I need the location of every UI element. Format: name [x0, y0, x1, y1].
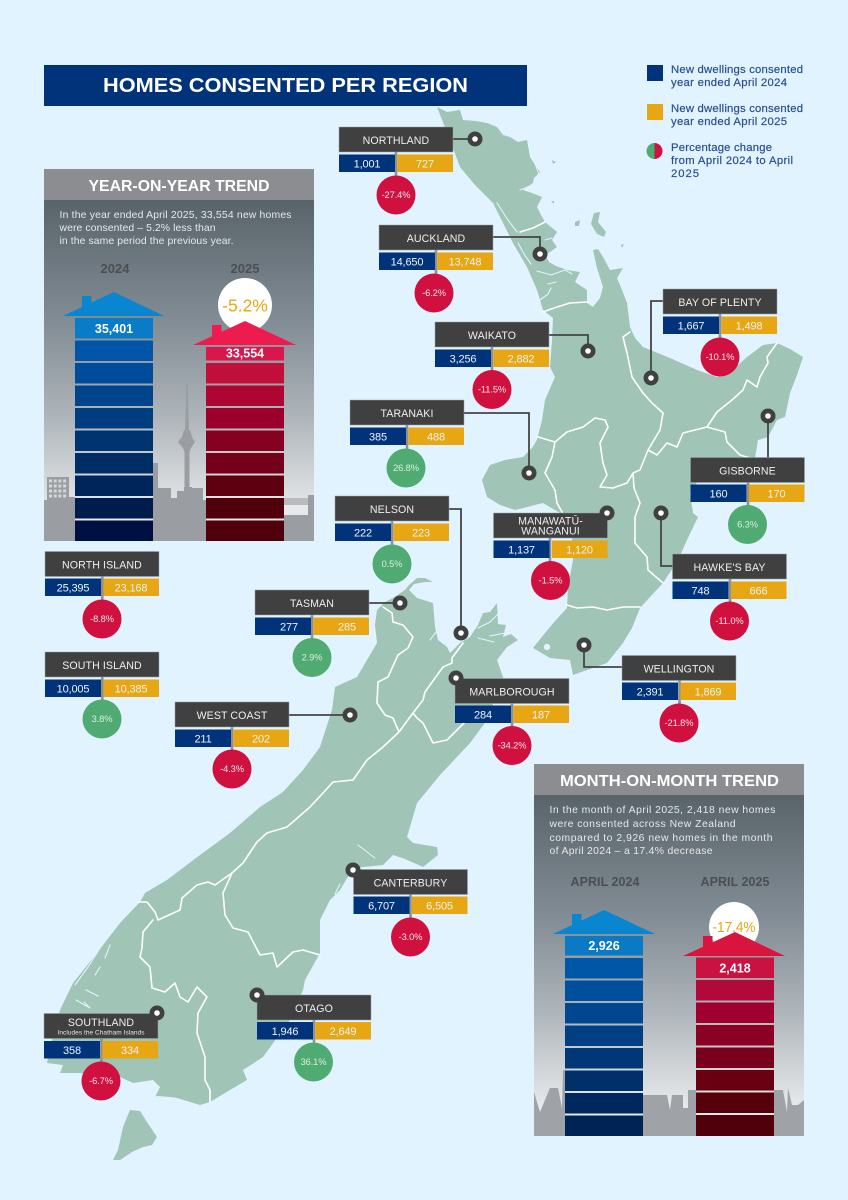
callout: -5.2%: -5.2% — [222, 296, 268, 316]
label: Southland — [44, 1014, 158, 1038]
region: Wellington — [576, 638, 736, 742]
label: Manawatū-Wanganui — [494, 513, 608, 538]
house: April 2024 — [553, 910, 655, 1136]
legend text: percentage change: 2025 — [671, 168, 699, 180]
panel: year-on-year trend — [44, 169, 314, 541]
change: Wellington: -21.8% — [665, 718, 693, 728]
values: Nelson — [335, 524, 449, 541]
change: Gisborne: 6.3% — [737, 520, 758, 530]
values: Auckland: 13,748 — [449, 256, 481, 268]
label: Southland: SOUTHLAND — [68, 1017, 134, 1029]
values: West Coast: 202 — [252, 734, 270, 746]
values: Northland — [339, 154, 453, 172]
summary: South Island — [45, 652, 159, 738]
summary: North Island — [45, 552, 159, 638]
legend swatch: 2025 — [647, 104, 663, 120]
values: Northland: 727 — [416, 158, 434, 170]
label: West Coast — [175, 702, 289, 727]
panel description: In the year ended April 2025, 33,554 new homes — [60, 210, 292, 221]
title banner: HOMES CONSENTED PER REGION — [103, 75, 468, 97]
change: Canterbury: -3.0% — [399, 932, 422, 942]
label: Taranaki — [350, 400, 464, 425]
legend text: 2024: New dwellings consented — [671, 64, 803, 76]
region: Taranaki — [350, 400, 536, 488]
values: Manawatū-Wanganui — [494, 540, 608, 558]
values: Marlborough — [455, 706, 569, 723]
region: West Coast — [175, 702, 358, 788]
values: Gisborne: 160 — [710, 488, 727, 500]
change: Wellington — [660, 704, 698, 742]
pin: Gisborne — [760, 408, 776, 424]
values: Nelson: 223 — [412, 528, 430, 540]
label: Wellington: WELLINGTON — [644, 664, 714, 676]
region: Marlborough — [448, 670, 569, 765]
values: South Island — [45, 680, 159, 697]
house: April 2025: 2,418 — [719, 962, 751, 976]
column label: 2024: 2024 — [101, 261, 130, 276]
values: Southland: 358 — [63, 1045, 81, 1057]
change: Bay of Plenty: -10.1% — [706, 352, 734, 362]
label: Taranaki: TARANAKI — [380, 408, 434, 420]
legend icon: percentage change — [646, 143, 662, 159]
pin: Canterbury — [346, 862, 360, 878]
values: Bay of Plenty: 1,667 — [678, 320, 704, 332]
column label: 2025: 2025 — [231, 261, 259, 276]
panel description: In the month of April 2025, 2,418 new homes — [550, 805, 776, 816]
callout: -5.2% — [218, 278, 272, 332]
change: Tasman — [292, 638, 332, 677]
map: South Island — [47, 578, 518, 1105]
legend text: 2024: year ended April 2024 — [671, 77, 787, 89]
legend text: percentage change: from April 2024 to April — [671, 155, 793, 167]
panel header — [44, 169, 314, 200]
change: Manawatū-Wanganui: -1.5% — [539, 576, 562, 586]
pin: Bay of Plenty — [644, 370, 658, 386]
panel description: were consented – 5.2% less than — [58, 223, 216, 234]
change: Marlborough: -34.2% — [498, 740, 526, 750]
pin: Marlborough — [448, 670, 464, 686]
region: Nelson — [335, 496, 468, 640]
values: North Island: 25,395 — [57, 582, 89, 594]
region: Waikato — [435, 322, 596, 409]
change: West Coast — [212, 750, 252, 788]
change: Waikato — [472, 370, 512, 409]
values: Waikato — [435, 350, 549, 367]
label: Manawatū-Wanganui: MANAWATŪ- — [518, 516, 583, 528]
values: Otago: 2,649 — [330, 1026, 356, 1038]
pin: Nelson — [454, 626, 468, 640]
panel description: compared to 2,926 new homes in the month — [550, 833, 773, 844]
region: Bay of Plenty — [644, 289, 777, 386]
values: South Island: 10,005 — [57, 684, 89, 696]
region: Hawke's Bay — [654, 506, 786, 640]
values: West Coast — [175, 730, 289, 747]
values: Gisborne — [690, 484, 804, 502]
label: Canterbury: CANTERBURY — [374, 878, 447, 890]
values: Bay of Plenty: 1,498 — [736, 320, 762, 332]
label: West Coast: WEST COAST — [197, 710, 268, 722]
values: Gisborne: 170 — [768, 488, 785, 500]
pin: Northland — [468, 132, 482, 146]
label: Nelson: NELSON — [370, 504, 414, 516]
change: North Island: -8.8% — [90, 614, 114, 624]
region: Manawatū-Wanganui — [494, 506, 614, 600]
values: Tasman: 277 — [280, 622, 298, 634]
panel description: were consented across New Zealand — [548, 819, 736, 830]
skyline: city — [534, 1070, 804, 1136]
values: Marlborough: 284 — [474, 710, 492, 722]
label: Northland: NORTHLAND — [363, 135, 430, 147]
values: Taranaki — [350, 428, 464, 445]
panel: month-on-month trend — [534, 764, 804, 1136]
label: Tasman: TASMAN — [290, 598, 334, 610]
map: harbours and lakes — [75, 160, 572, 1098]
change: Hawke's Bay: -11.0% — [715, 616, 744, 626]
values: Waikato: 2,882 — [508, 354, 534, 366]
legend text: 2025: year ended April 2025 — [671, 116, 787, 128]
legend swatch: 2024 — [647, 65, 663, 81]
house: 2025: 33,554 — [226, 346, 264, 360]
region: Canterbury — [346, 862, 468, 956]
label: Otago: OTAGO — [295, 1003, 333, 1015]
column label: April 2025: APRIL 2025 — [700, 875, 770, 889]
label: South Island: SOUTH ISLAND — [62, 660, 142, 672]
change: Auckland: -6.2% — [422, 288, 446, 298]
values: Canterbury: 6,505 — [426, 900, 453, 912]
map: small islands — [551, 160, 624, 248]
pin: Manawatū-Wanganui — [600, 506, 614, 520]
values: Hawke's Bay: 666 — [750, 586, 767, 598]
legend — [646, 64, 803, 180]
label: Waikato — [435, 322, 549, 347]
pin: Taranaki — [522, 466, 536, 480]
values: Taranaki: 488 — [427, 432, 445, 444]
values: Manawatū-Wanganui: 1,137 — [508, 544, 535, 556]
label: Bay of Plenty: BAY OF PLENTY — [678, 297, 762, 309]
values: North Island — [45, 578, 159, 596]
values: Otago: 1,946 — [272, 1026, 298, 1038]
label: Hawke's Bay: HAWKE'S BAY — [694, 562, 766, 574]
map: North Island — [437, 107, 803, 675]
label: Nelson — [335, 496, 449, 521]
panel header — [534, 764, 804, 795]
skyline: Auckland — [44, 383, 314, 541]
values: Otago — [257, 1022, 371, 1040]
region: Gisborne — [690, 408, 804, 544]
house: April 2024: 2,926 — [588, 939, 620, 953]
column label: April 2024: APRIL 2024 — [570, 875, 640, 889]
change: Taranaki — [386, 448, 426, 488]
values: Auckland: 14,650 — [391, 256, 423, 268]
change: Auckland — [414, 274, 454, 312]
panel description: of April 2024 – a 17.4% decrease — [550, 846, 713, 857]
label: Wellington — [622, 656, 736, 680]
change: West Coast: -4.3% — [220, 764, 244, 774]
label: Gisborne: GISBORNE — [719, 466, 776, 478]
region: Auckland — [379, 225, 548, 312]
values: West Coast: 211 — [194, 734, 212, 746]
callout: -17.4% — [709, 902, 759, 952]
change: Southland: -6.7% — [89, 1076, 113, 1086]
label: North Island: NORTH ISLAND — [62, 560, 142, 572]
house: April 2025 — [683, 932, 785, 1136]
change: Nelson — [372, 544, 412, 584]
pin: West Coast — [342, 708, 358, 722]
map: Stewart Island — [113, 1110, 157, 1160]
change: Taranaki: 26.8% — [393, 463, 419, 473]
values: Canterbury — [354, 896, 468, 914]
values: Northland: 1,001 — [354, 158, 380, 170]
values: Tasman: 285 — [338, 622, 356, 634]
change: South Island: 3.8% — [92, 714, 112, 724]
change: Tasman: 2.9% — [302, 652, 322, 662]
pin: Waikato — [580, 344, 596, 358]
values: Canterbury: 6,707 — [368, 900, 395, 912]
values: Southland — [44, 1041, 158, 1058]
pin: Hawke's Bay — [654, 506, 668, 520]
label: Manawatū-Wanganui: WANGANUI — [521, 526, 580, 538]
label: Waikato: WAIKATO — [468, 330, 516, 342]
values: Hawke's Bay — [672, 582, 786, 599]
label: Tasman — [255, 590, 369, 615]
pin: Tasman — [392, 596, 408, 610]
map: New Zealand regions — [47, 107, 803, 1160]
callout: -17.4%: -17.4% — [712, 919, 756, 936]
label: Northland — [339, 127, 453, 152]
panel header: YEAR-ON-YEAR TREND — [88, 178, 270, 195]
label: Marlborough: MARLBOROUGH — [469, 686, 555, 698]
values: Waikato: 3,256 — [450, 354, 476, 366]
values: Wellington: 2,391 — [637, 686, 663, 698]
change: Northland: -27.4% — [382, 190, 410, 200]
values: Nelson: 222 — [354, 528, 372, 540]
region: Southland — [44, 1006, 164, 1100]
label: Auckland — [379, 225, 493, 250]
change: Nelson: 0.5% — [382, 559, 402, 569]
values: Southland: 334 — [121, 1045, 139, 1057]
values: Tasman — [255, 618, 369, 635]
values: Taranaki: 385 — [369, 432, 387, 444]
house: 2024 — [63, 292, 164, 541]
values: North Island: 23,168 — [115, 582, 147, 594]
label: Southland: Includes the Chatham Islands — [58, 1030, 145, 1036]
pin: Southland — [150, 1006, 164, 1020]
values: Marlborough: 187 — [532, 710, 550, 722]
values: Wellington: 1,869 — [695, 686, 721, 698]
region: Northland — [339, 127, 482, 214]
legend text: percentage change: Percentage change — [671, 142, 772, 154]
map: regional boundaries — [520, 222, 777, 610]
house: 2025 — [193, 321, 296, 541]
change: Otago: 36.1% — [301, 1057, 326, 1067]
panel header: MONTH-ON-MONTH TREND — [560, 773, 779, 790]
values: Hawke's Bay: 748 — [692, 586, 709, 598]
pin: Auckland — [532, 246, 548, 262]
map: Great Barrier Island — [591, 212, 606, 237]
change: Waikato: -11.5% — [478, 384, 506, 394]
label: Auckland: AUCKLAND — [407, 233, 465, 245]
values: South Island: 10,385 — [115, 684, 147, 696]
legend text: 2025: New dwellings consented — [671, 103, 803, 115]
title banner — [44, 65, 527, 106]
house: 2024: 35,401 — [95, 322, 133, 336]
values: Bay of Plenty — [663, 316, 777, 334]
pin: Wellington — [576, 638, 592, 652]
values: Manawatū-Wanganui: 1,120 — [566, 544, 593, 556]
region: Otago — [250, 988, 371, 1082]
values: Wellington — [622, 682, 736, 700]
pin: Otago — [250, 988, 264, 1002]
change: Northland — [376, 176, 416, 214]
values: Auckland — [379, 252, 493, 270]
region: Tasman — [255, 590, 408, 677]
panel description: in the same period the previous year. — [60, 236, 234, 247]
